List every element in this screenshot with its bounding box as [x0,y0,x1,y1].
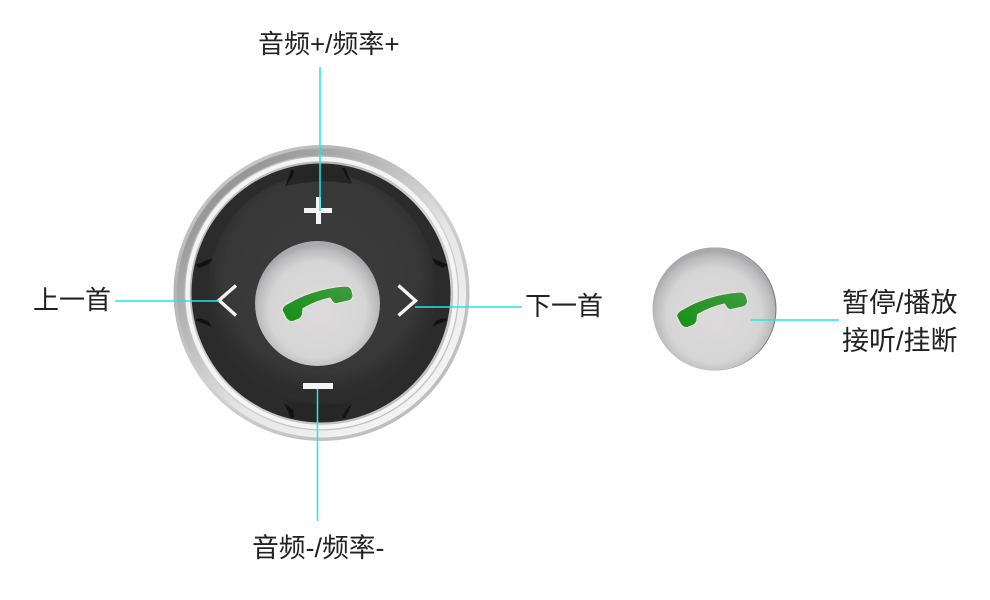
icon: minus [303,383,333,389]
main control knob [174,145,470,441]
icon: green phone small [676,292,748,328]
icon: green phone [282,286,353,322]
label: previous track: 上一首 [33,285,111,315]
notches [195,168,448,418]
black disc [192,164,450,422]
icon: right chevron [398,286,416,316]
center call button [255,241,380,366]
label: volume down: 音频-/频率- [252,533,384,563]
icon: plus [304,197,332,224]
label: call button functions: 接听/挂断 [842,326,958,356]
label: call button functions: 暂停/播放 [842,288,958,318]
top and bottom key tabs [286,165,351,186]
leader lines [115,67,839,521]
label: call button functions [842,288,958,356]
metal ring [174,145,470,441]
small call button [652,248,776,370]
label: next track: 下一首 [525,291,603,321]
icon: left chevron [219,286,236,316]
label: volume up: 音频+/频率+ [258,29,400,59]
